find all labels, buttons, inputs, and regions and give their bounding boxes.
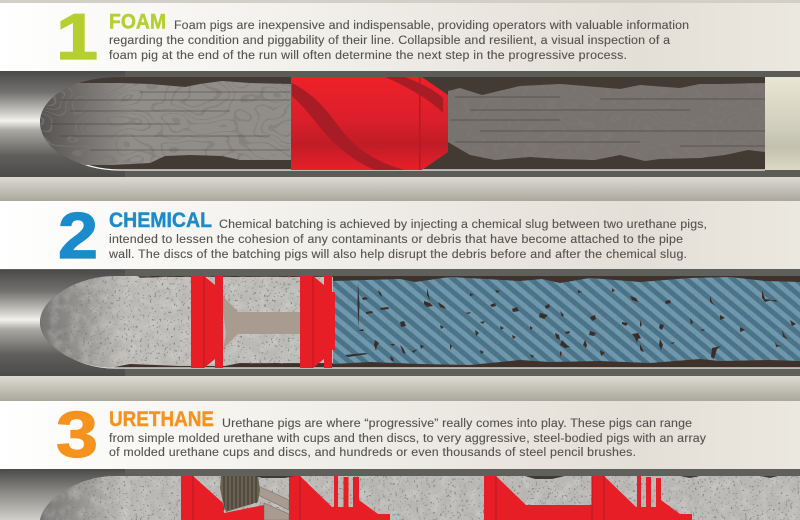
text block: chemical xyxy=(108,217,707,261)
number 3: 3 xyxy=(56,398,98,471)
heading: urethane: URETHANE xyxy=(109,408,214,431)
top edge strip xyxy=(0,0,800,3)
steel pencil brush xyxy=(220,476,260,512)
red batching pig, left xyxy=(191,276,223,368)
text block: urethane xyxy=(109,416,707,459)
header band: foam xyxy=(0,3,800,71)
heading: foam: FOAM xyxy=(109,10,166,34)
red urethane pig with discs xyxy=(289,476,390,520)
text block: chemical: Chemical batching is achieved by injecting a chemical slug between two urethane pigs, xyxy=(219,217,707,231)
number 1: 1 xyxy=(56,0,98,73)
debris on pipe wall xyxy=(255,476,778,479)
panel: foam xyxy=(0,0,800,177)
text block: foam: Foam pigs are inexpensive and indispensable, providing operators with valuable information xyxy=(174,18,689,32)
text block: chemical: wall. The discs of the batching pigs will also help disrupt the debris before and after the chemical slug. xyxy=(108,247,687,261)
header band: chemical xyxy=(0,201,800,269)
heading: chemical: CHEMICAL xyxy=(109,209,212,232)
red batching pig, right xyxy=(300,276,335,368)
red urethane pig with brush xyxy=(181,476,264,520)
batching pig shaft xyxy=(223,296,300,349)
steel rods xyxy=(258,486,289,520)
text block: chemical: intended to lessen the cohesion of any contaminants or debris that have become attached to the pipe xyxy=(109,232,683,246)
chemical slug xyxy=(333,277,800,365)
text block: urethane: from simple molded urethane with cups and then discs, to very aggressive, steel-bodied pigs with an array xyxy=(109,431,707,445)
header band: urethane xyxy=(0,401,800,469)
text block: urethane: Urethane pigs are where “progressive” really comes into play. These pigs can range xyxy=(222,416,692,430)
text block: foam: foam pig at the end of the run will often determine the next step in the progressive process. xyxy=(109,48,627,62)
text block: foam: regarding the condition and piggability of their line. Collapsible and resilient, a visual inspection of a xyxy=(109,33,670,47)
pipe: chemical batching cutaway xyxy=(0,269,800,376)
red spiral foam pig xyxy=(291,77,448,170)
pipe end cap xyxy=(765,77,800,170)
text block: foam xyxy=(109,18,689,62)
foam pig body, rear xyxy=(448,80,765,165)
number 2: 2 xyxy=(58,199,98,272)
panel: urethane xyxy=(0,398,800,520)
pipe: urethane pig cutaway xyxy=(0,469,800,520)
red urethane pig, double cup xyxy=(484,476,692,520)
foam body xyxy=(40,476,800,520)
panel: chemical xyxy=(0,199,800,376)
debris specks in slug xyxy=(345,282,796,362)
foam batching pig bodies xyxy=(40,270,333,368)
pipe: foam pig cutaway xyxy=(0,71,800,177)
text block: urethane: of molded urethane cups and discs, and hundreds or even thousands of steel pencil brushes. xyxy=(109,445,636,459)
foam pig body, front xyxy=(40,81,291,165)
